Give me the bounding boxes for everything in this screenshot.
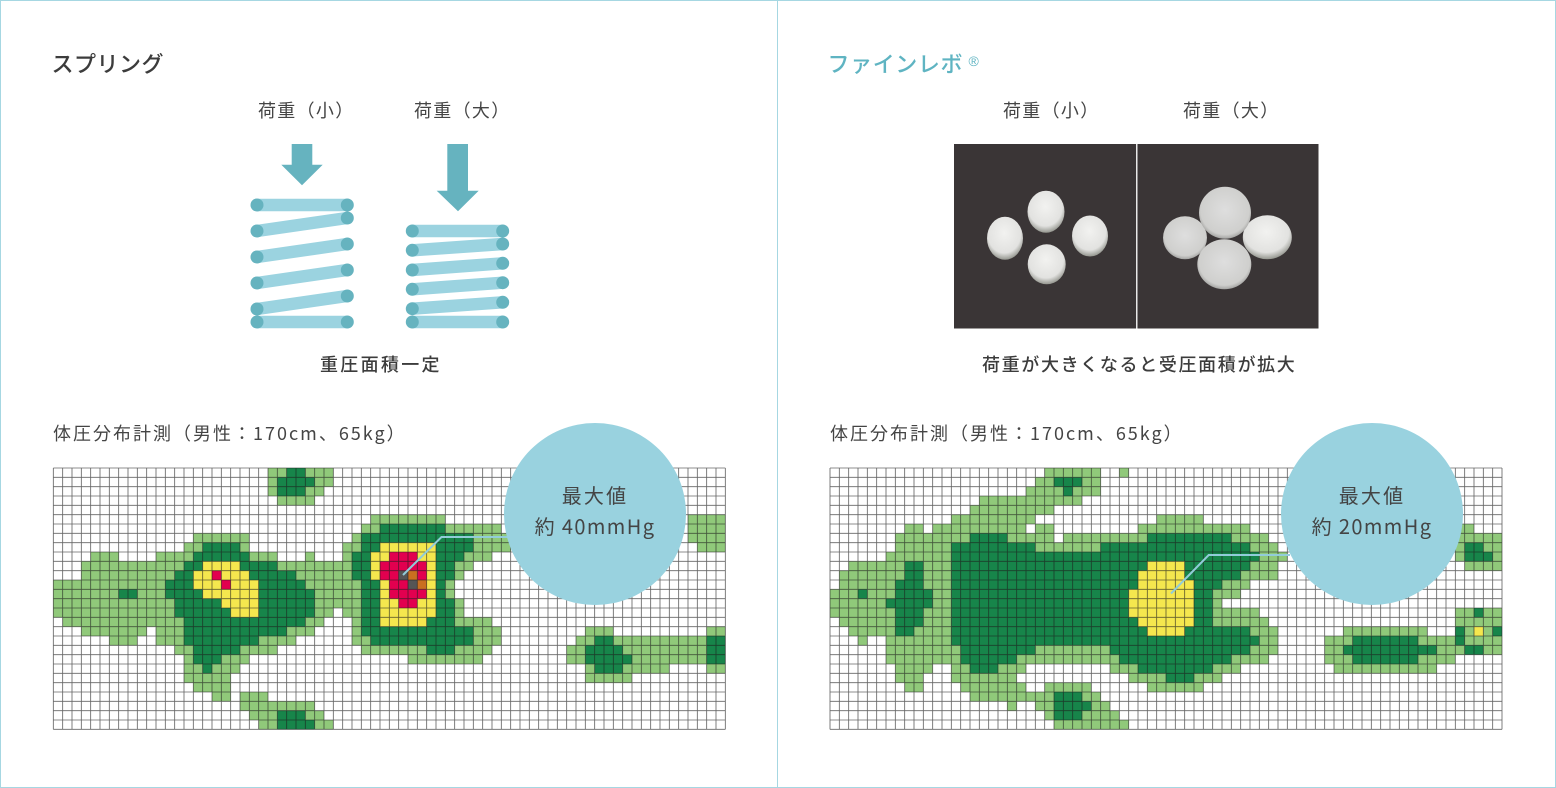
label: small load: 荷重（小）	[1003, 97, 1100, 123]
panel: spring	[52, 47, 725, 729]
label: small load: 荷重（小）	[258, 97, 354, 123]
icon: spring under small load	[250, 198, 354, 328]
icon: spring under large load	[406, 224, 509, 328]
heading: pressure measurement: 体圧分布計測（男性：170cm、65kg）	[53, 420, 407, 446]
arrow: small load	[281, 144, 323, 185]
callout: max value 40mmHg: 約 40mmHg	[535, 511, 655, 540]
registered mark: ®	[968, 53, 980, 69]
caption: spring: 重圧面積一定	[320, 351, 442, 377]
callout: max value 20mmHg: 最大値	[1339, 480, 1405, 509]
panel: finelevo	[828, 47, 1502, 729]
photo: balls under load	[954, 144, 1318, 328]
chart: pressure heatmap, spring	[53, 468, 725, 729]
chart: pressure heatmap, finelevo	[830, 468, 1502, 729]
callout: max value 20mmHg: 約 20mmHg	[1312, 511, 1432, 540]
heading: spring: スプリング	[52, 47, 164, 79]
callout leader line, spring	[403, 537, 512, 575]
heading: pressure measurement: 体圧分布計測（男性：170cm、65kg）	[830, 420, 1184, 446]
heading: finelevo: ファインレボ	[828, 47, 963, 79]
callout: max value 40mmHg	[504, 423, 686, 605]
arrow: large load	[437, 144, 479, 211]
label: large load: 荷重（大）	[1183, 97, 1280, 123]
caption: finelevo: 荷重が大きくなると受圧面積が拡大	[982, 351, 1296, 377]
callout leader line, finelevo	[1171, 555, 1290, 594]
label: large load: 荷重（大）	[414, 97, 510, 123]
callout: max value 40mmHg: 最大値	[562, 480, 628, 509]
callout: max value 20mmHg	[1281, 423, 1463, 605]
